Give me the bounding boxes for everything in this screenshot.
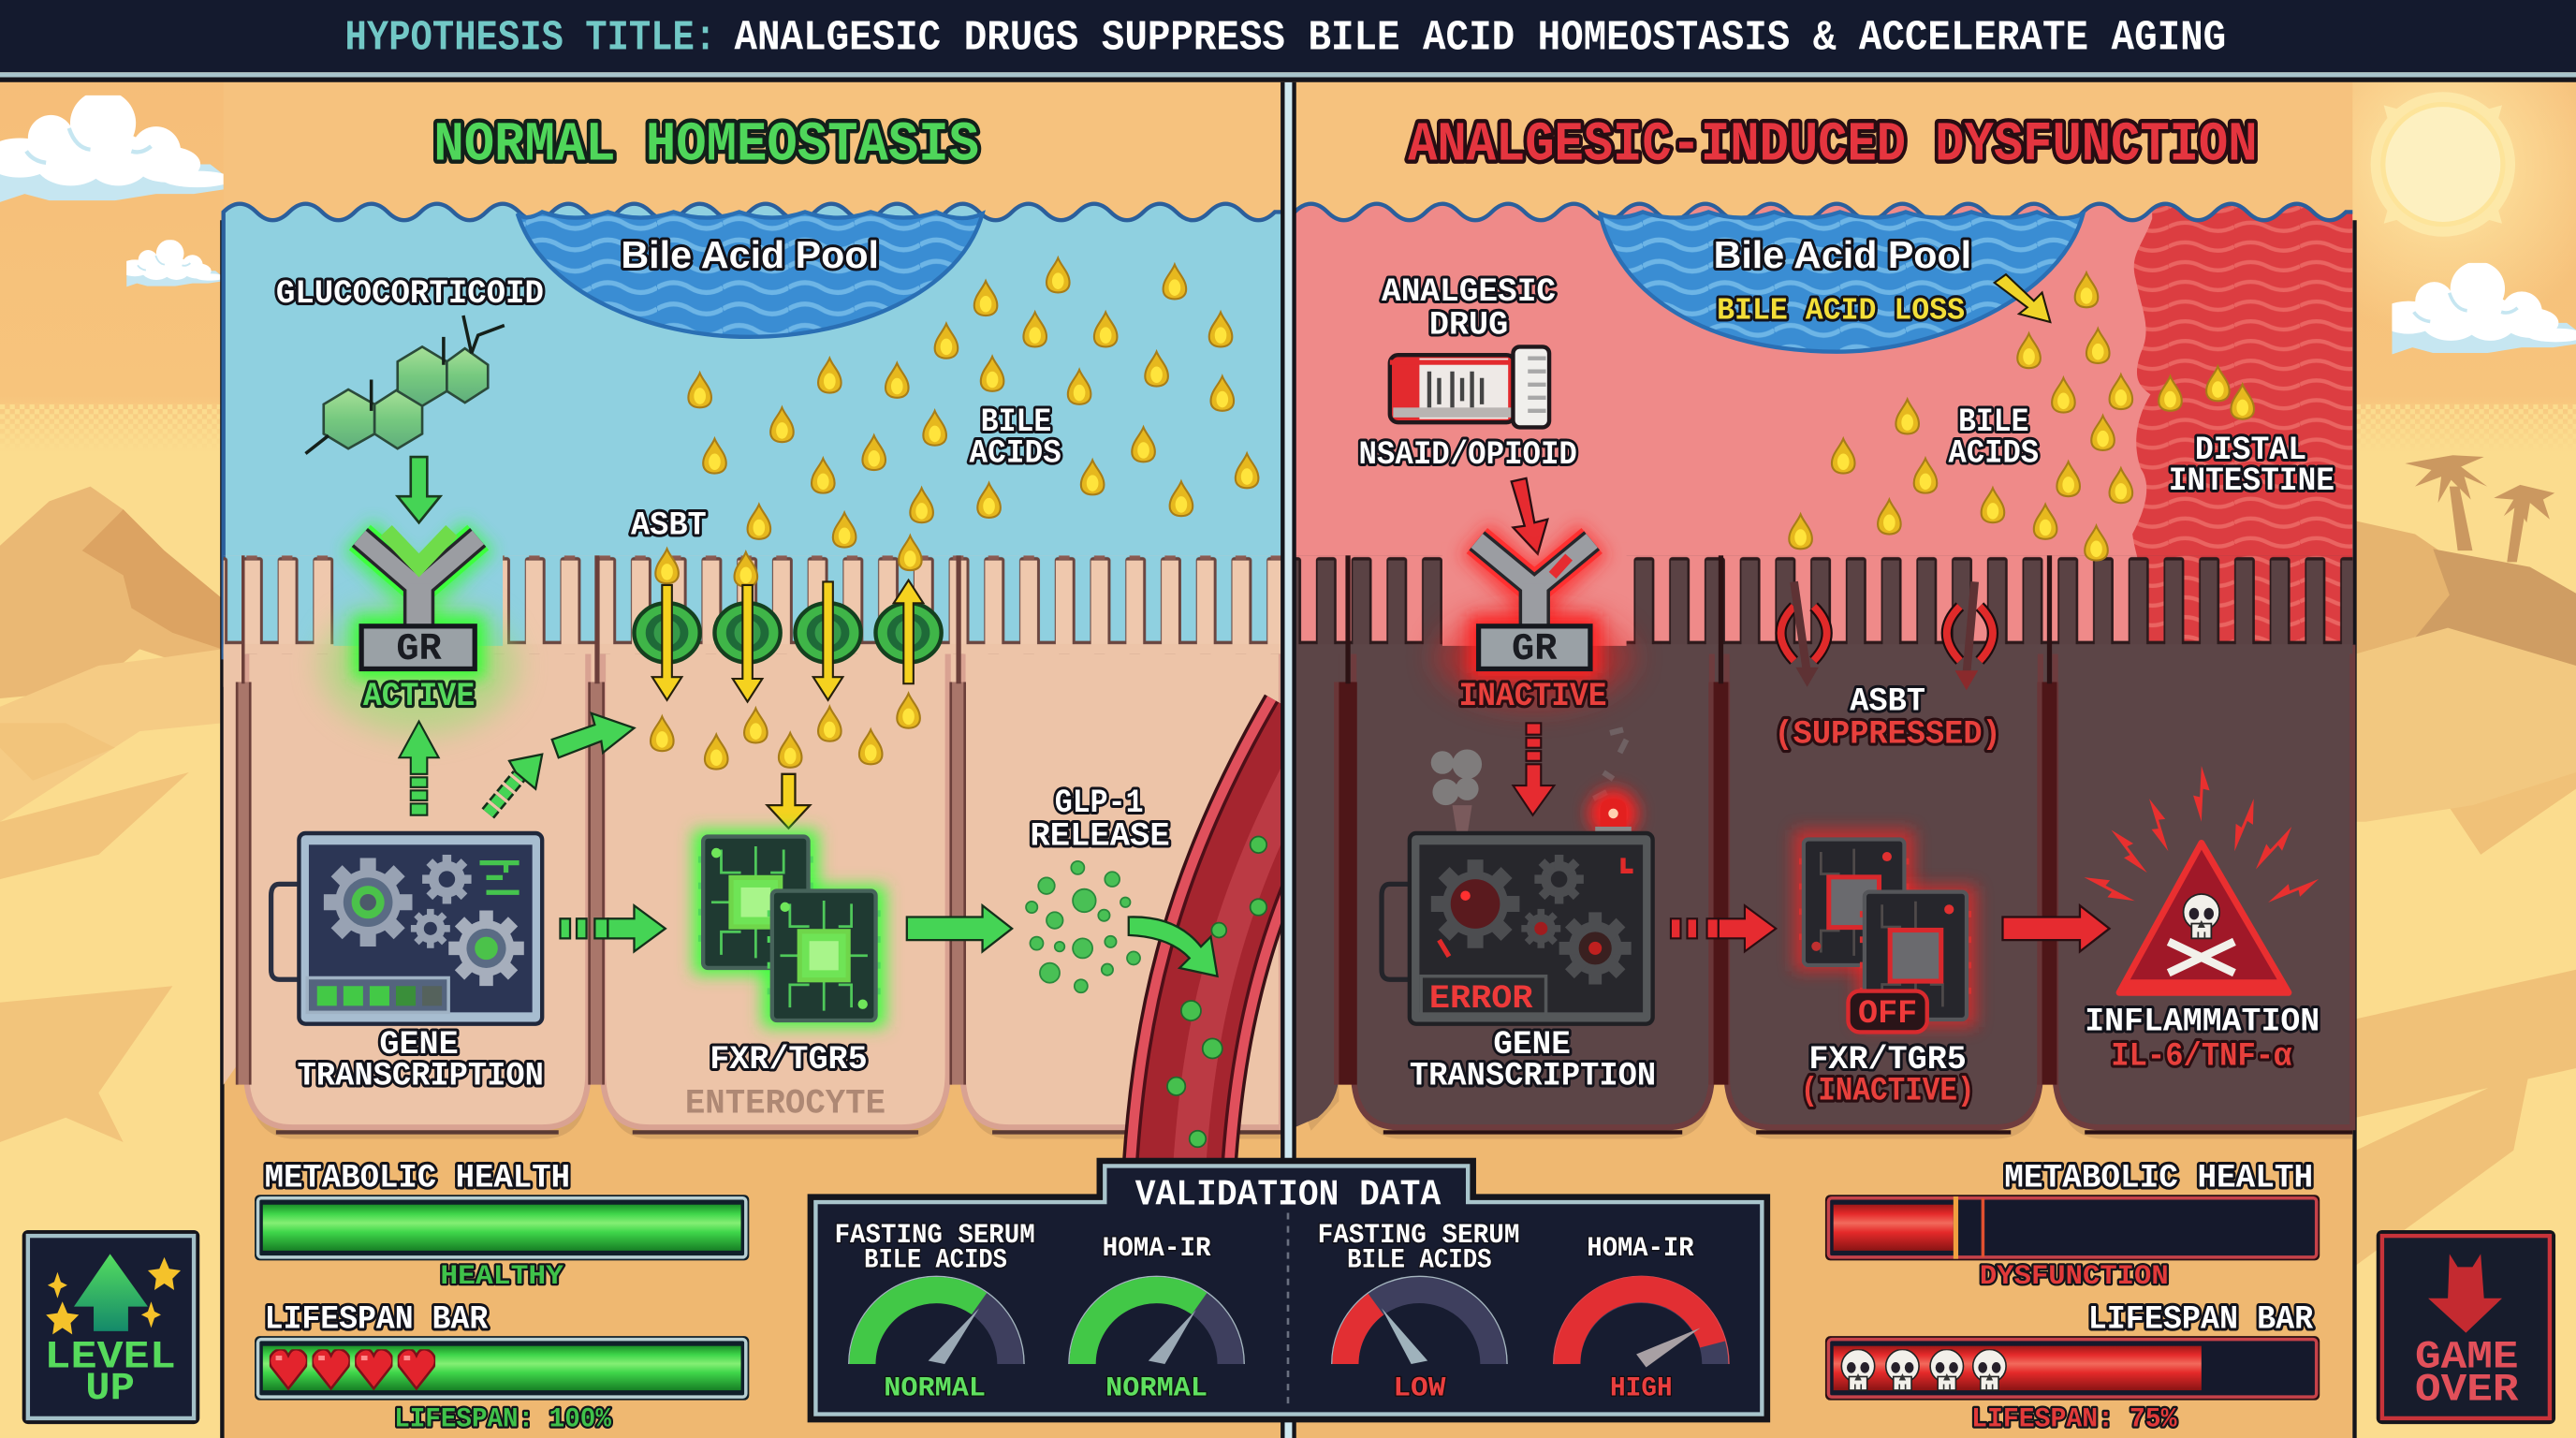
center divider	[1281, 82, 1296, 1438]
label: glucocorticoid: GLUCOCORTICOID	[276, 275, 544, 313]
panel: normal homeostasis: ACIDS	[970, 434, 1061, 472]
heading: normal homeostasis: NORMAL HOMEOSTASIS	[433, 112, 979, 176]
gauge: HOMA-IR normal	[1070, 1232, 1244, 1403]
blood vessel	[1167, 723, 1325, 1167]
heading: validation data: VALIDATION DATA	[1135, 1175, 1442, 1216]
gauge: HOMA-IR high: HOMA-IR	[1587, 1232, 1694, 1264]
gauge: fasting serum bile acids low	[1318, 1219, 1519, 1403]
gauge: fasting serum bile acids low: LOW	[1393, 1372, 1446, 1403]
icon: pill bottle	[1390, 346, 1549, 427]
panel: normal homeostasis	[224, 204, 1325, 1435]
free bile acids	[1789, 272, 2254, 561]
badge: level up	[24, 1233, 198, 1421]
label: ASBT suppressed: ASBT	[1850, 682, 1925, 720]
arrow: gene to chips	[560, 905, 666, 951]
icon: inflammation warning	[2081, 766, 2322, 992]
lifespan bar: 75 percent	[1825, 1300, 2320, 1435]
label: enterocyte: ENTEROCYTE	[685, 1084, 886, 1123]
cells: enterocytes	[224, 644, 1281, 1139]
lifespan bar: 100 percent	[255, 1300, 749, 1435]
microvilli	[224, 555, 1281, 654]
heading: analgesic-induced dysfunction: ANALGESIC-INDUCED DYSFUNCTION	[1408, 112, 2258, 176]
smoke	[1431, 729, 1627, 846]
panel: analgesic-induced dysfunction: ACIDS	[1949, 434, 2039, 472]
icon: gene transcription machine	[271, 833, 542, 1024]
label: active: ACTIVE	[363, 678, 475, 715]
badge: level up: LEVEL	[44, 1335, 176, 1380]
arrow: chips to GLP-1	[907, 905, 1012, 951]
arrow: receptor down to gene	[1513, 723, 1554, 815]
label: GLP-1 release: RELEASE	[1030, 817, 1170, 855]
label: gene transcription: TRANSCRIPTION	[298, 1058, 544, 1095]
receptor GR active	[320, 531, 518, 735]
GLP-1 particles	[1026, 861, 1140, 992]
gauge: fasting serum bile acids low: BILE ACIDS	[1347, 1243, 1492, 1275]
label: gene transcription: GENE	[1493, 1026, 1571, 1064]
gauge: fasting serum bile acids low: FASTING SERUM	[1318, 1219, 1519, 1251]
panel: analgesic-induced dysfunction: INTESTINE	[2169, 462, 2334, 500]
label: bile acids: BILE	[981, 404, 1051, 441]
badge: game over	[2378, 1233, 2553, 1421]
lumen: red	[1295, 204, 2352, 657]
icon: FXR/TGR5 chips active	[694, 829, 886, 1027]
gauge: fasting serum bile acids normal: NORMAL	[884, 1372, 986, 1403]
icon: FXR/TGR5 chips off	[1794, 829, 1976, 1033]
label: analgesic drug: ANALGESIC	[1382, 273, 1556, 311]
gauge: fasting serum bile acids normal: FASTING SERUM	[835, 1219, 1035, 1251]
label: fxr tgr5: FXR/TGR5	[710, 1041, 868, 1078]
label: gene transcription: TRANSCRIPTION	[1410, 1058, 1656, 1095]
gauge: HOMA-IR high	[1554, 1232, 1728, 1403]
label: analgesic drug	[1382, 273, 1556, 344]
gauge: HOMA-IR high: HIGH	[1610, 1372, 1673, 1403]
label: analgesic drug: DRUG	[1429, 306, 1508, 344]
cells: damaged enterocytes	[1295, 644, 2352, 1139]
panel: validation data	[812, 1162, 1766, 1418]
title text: HYPOTHESIS TITLE:	[345, 14, 716, 63]
icon: steroid molecule	[305, 315, 505, 453]
label: inflammation	[2085, 1004, 2320, 1076]
icon: alarm beacon	[1588, 789, 1638, 838]
arrow: GR up from gene	[399, 722, 439, 815]
badge: level up: UP	[85, 1366, 135, 1411]
microvilli	[1295, 555, 2352, 654]
arrow: glucocorticoid to receptor	[398, 457, 440, 522]
icon: gene transcription machine error: ERROR	[1429, 980, 1533, 1018]
metabolic health bar: dysfunction: METABOLIC HEALTH	[2004, 1159, 2313, 1196]
arrow: chips to inflammation	[2002, 905, 2110, 951]
lifespan bar: 100 percent: LIFESPAN BAR	[265, 1300, 489, 1338]
ASBT transporters	[634, 580, 942, 702]
label: asbt: ASBT	[631, 507, 707, 545]
metabolic health bar: healthy	[255, 1159, 749, 1292]
label: FXR/TGR5 inactive: (INACTIVE)	[1801, 1072, 1975, 1109]
icon: FXR/TGR5 chips off: OFF	[1858, 995, 1917, 1033]
arrow: gene to chips	[1671, 905, 1776, 951]
metabolic health bar: healthy: HEALTHY	[440, 1260, 564, 1292]
lifespan bar: 75 percent: LIFESPAN: 75%	[1971, 1403, 2177, 1435]
label: gene transcription	[298, 1026, 544, 1095]
title bar: ANALGESIC DRUGS SUPPRESS BILE ACID HOMEOSTASIS & ACCELERATE AGING	[735, 14, 2226, 63]
lifespan bar: 75 percent: LIFESPAN BAR	[2088, 1300, 2314, 1338]
clouds	[0, 91, 2576, 354]
receptor GR inactive: GR	[1512, 628, 1558, 671]
metabolic health bar: dysfunction: DYSFUNCTION	[1980, 1260, 2169, 1292]
label: inactive: INACTIVE	[1459, 678, 1606, 715]
arrow: bile acid loss	[1995, 274, 2050, 322]
label: NSAID/opioid: NSAID/OPIOID	[1358, 436, 1577, 474]
bile acid pool	[1600, 212, 2083, 352]
label: inflammation: INFLAMMATION	[2085, 1004, 2320, 1041]
label: bile acid pool: Bile Acid Pool	[621, 233, 879, 276]
label: bile acid pool: Bile Acid Pool	[1714, 233, 1971, 276]
lifespan bar: 100 percent: LIFESPAN: 100%	[394, 1403, 611, 1435]
metabolic health bar: healthy: METABOLIC HEALTH	[265, 1159, 570, 1196]
wave edge	[1295, 204, 2352, 220]
panel: analgesic-induced dysfunction	[1295, 198, 2352, 1435]
cell walls	[1334, 555, 2058, 1085]
label: ASBT suppressed: (SUPPRESSED)	[1775, 715, 2001, 753]
label: FXR/TGR5 inactive: FXR/TGR5	[1808, 1041, 1967, 1078]
title bar	[0, 0, 2576, 82]
free bile acids	[651, 258, 1258, 770]
ASBT suppressed transporters	[1781, 581, 1993, 690]
gauge: HOMA-IR normal: NORMAL	[1105, 1372, 1208, 1403]
label: gene transcription: GENE	[379, 1026, 459, 1064]
label: ASBT suppressed	[1775, 682, 2001, 753]
label: FXR/TGR5 inactive	[1801, 1041, 1975, 1109]
bile acid pool	[518, 212, 983, 337]
label: bile acid loss: BILE ACID LOSS	[1717, 294, 1965, 330]
label: GLP-1 release: GLP-1	[1055, 785, 1144, 822]
arrow: yellow into chips	[768, 774, 810, 829]
receptor GR inactive	[1436, 539, 1633, 707]
distal intestine	[2132, 198, 2352, 657]
panel floor tones	[220, 82, 2357, 1438]
metabolic health bar: dysfunction	[1825, 1159, 2320, 1292]
badge: game over: GAME	[2415, 1335, 2519, 1380]
label: bile acids: BILE	[1958, 404, 2029, 441]
label: gene transcription	[1410, 1026, 1656, 1095]
receptor GR active: GR	[396, 628, 443, 671]
label: distal intestine: DISTAL	[2195, 432, 2306, 469]
label: GLP-1 release	[1030, 785, 1170, 855]
icon: gene transcription machine error	[1382, 833, 1653, 1024]
lumen: blue	[224, 204, 1284, 657]
gauge: HOMA-IR normal: HOMA-IR	[1103, 1232, 1211, 1264]
sun	[2271, 0, 2576, 337]
arrow: GLP-1 into vessel	[1129, 917, 1218, 976]
cell walls	[236, 555, 966, 1085]
label: inflammation: IL-6/TNF-α	[2111, 1038, 2292, 1076]
gauge: fasting serum bile acids normal	[835, 1219, 1035, 1403]
gauge: fasting serum bile acids normal: BILE ACIDS	[864, 1243, 1007, 1275]
badge: game over: OVER	[2415, 1368, 2519, 1413]
arrow: drug to receptor	[1512, 478, 1547, 554]
arrow: curved to bile acids	[488, 713, 634, 814]
